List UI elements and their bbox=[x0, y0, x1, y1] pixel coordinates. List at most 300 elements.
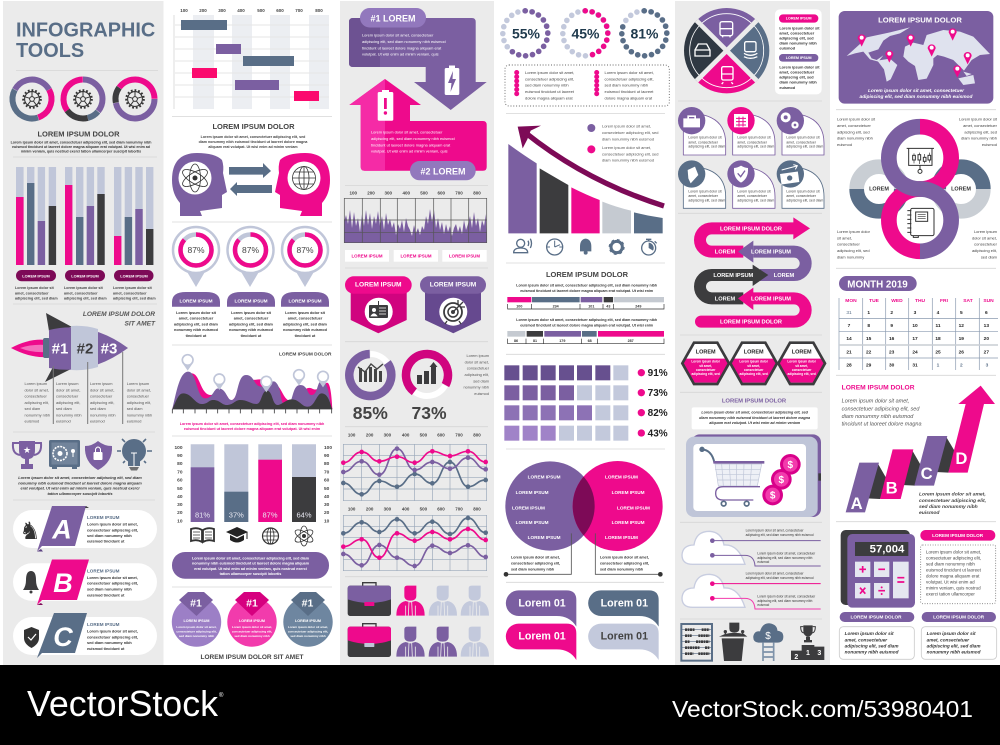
stacked bar 2: 287 bbox=[628, 339, 634, 343]
calendar: 12 bbox=[959, 323, 964, 329]
gantt chart: 300 bbox=[218, 8, 226, 13]
pink arrow panel: adipiscing elit, sed diam nonummy nibh euismod bbox=[371, 136, 455, 141]
white list panel: adipiscing elit, sed bbox=[779, 76, 814, 80]
hexagons: LOREM bbox=[744, 350, 764, 356]
clouds with leader lines: adipiscing elit, sed diam nonummy nibh bbox=[757, 556, 813, 560]
stacked bar heading: euismod tincidunt ut laoreet dolore magna aliquam erat volutpat. Ut wisi enim bbox=[520, 289, 653, 293]
label boxes: LOREM IPSUM bbox=[401, 254, 432, 259]
calendar: 1 bbox=[937, 362, 940, 368]
calendar: 29 bbox=[866, 362, 872, 368]
pin donuts: adipiscing elit, sed diam bbox=[283, 322, 328, 326]
calculator side panels: LOREM IPSUM DOLOR bbox=[933, 615, 985, 620]
percentage column chart: 40 bbox=[177, 494, 183, 500]
white list panel: LOREM IPSUM bbox=[786, 17, 812, 21]
line chart 1: 500 bbox=[420, 432, 428, 437]
icon cards: amet, consectetuer bbox=[688, 140, 719, 144]
figure eight rings: diam nonummy nibh bbox=[837, 136, 873, 141]
icon cards: adipiscing elit, sed diam bbox=[688, 198, 725, 202]
icon row text: tation ullamcorper suscipit lobortis bbox=[47, 491, 113, 496]
calendar: SAT bbox=[963, 298, 973, 304]
line chart 1: 700 bbox=[455, 432, 463, 437]
figure eight rings bbox=[837, 116, 998, 259]
figure eight rings: dolor sit amet, bbox=[972, 235, 997, 240]
rocket text columns: consectetuer bbox=[127, 394, 150, 399]
ABCD ribbon arrow: Lorem ipsum dolor sit amet, bbox=[919, 492, 986, 498]
ABCD ribbon arrow: consectetuer adipiscing elit, sed bbox=[842, 406, 920, 412]
gear donuts bbox=[5, 72, 162, 126]
calculator bbox=[841, 530, 915, 608]
pin donuts: nonummy nibh euismod bbox=[283, 328, 328, 332]
heading with text: diam nonummy nibh euismod tincidunt ut laoreet dolore magna bbox=[199, 140, 308, 144]
rocket: #3 bbox=[101, 340, 117, 358]
three badge circles: Lorem ipsum dolor sit amet, bbox=[176, 625, 217, 629]
venn diagram: LOREM IPSUM bbox=[528, 475, 561, 480]
rocket text columns: adipiscing elit, bbox=[56, 400, 80, 405]
three badge circles: #1 bbox=[246, 598, 258, 610]
snake arrows: LOREM bbox=[715, 296, 735, 302]
shield badges: LOREM IPSUM bbox=[355, 282, 402, 288]
pin donuts: tincidunt ut bbox=[186, 334, 207, 338]
title: TOOLS bbox=[16, 40, 84, 62]
white list panel: Lorem ipsum dolor sit bbox=[779, 65, 820, 69]
heads exchange bbox=[172, 153, 330, 216]
percentage column chart: 50 bbox=[177, 486, 183, 492]
calculator side panels: adipiscing elit, sed diam bbox=[845, 643, 898, 648]
panel: A bbox=[13, 506, 157, 552]
white list panel: adipiscing elit, sed bbox=[779, 37, 814, 41]
snake arrows: LOREM IPSUM bbox=[751, 250, 791, 256]
icon row text: erat volutpat. Ut wisi enim ad minim veniam, quis nostrud exerci bbox=[21, 486, 140, 491]
calculator side panels: consectetuer adipiscing elit, bbox=[926, 555, 981, 560]
hexagons: Lorem ipsum dolor bbox=[691, 360, 721, 364]
white list panel: LOREM IPSUM bbox=[786, 56, 812, 60]
dotted text box: dolore magna aliquam erat bbox=[604, 96, 653, 100]
figure eight rings: adipiscing elit, sed bbox=[837, 129, 870, 134]
calendar: 2 bbox=[890, 310, 893, 316]
line chart 2: 200 bbox=[366, 507, 374, 512]
figure eight rings: amet, consectetuer bbox=[837, 123, 872, 128]
white list panel: Lorem ipsum dolor sit bbox=[779, 26, 820, 30]
rocket heading: SIT AMET bbox=[124, 320, 156, 328]
progress donuts: adipiscing elit, bbox=[465, 372, 489, 377]
line chart 1: 800 bbox=[473, 432, 481, 437]
spiky area chart: 100 bbox=[350, 190, 358, 196]
figure eight rings: adipiscing elit, sed bbox=[837, 248, 870, 253]
speech bubbles: Lorem 01 bbox=[518, 597, 566, 609]
percentage column chart: 70 bbox=[177, 470, 183, 476]
figure eight rings: consectetuer bbox=[837, 242, 860, 247]
percentage column chart: 10 bbox=[177, 518, 183, 524]
dotted text box: Lorem ipsum dolor sit amet, bbox=[604, 70, 654, 75]
snake arrows: LOREM bbox=[774, 273, 794, 279]
figure eight rings: Lorem ipsum dolor sit bbox=[837, 116, 876, 121]
venn diagram: sed diam nonummy nibh bbox=[600, 567, 643, 571]
pin donuts: LOREM IPSUM bbox=[179, 298, 213, 304]
purple arrow panel: adipiscing elit, sed diam nonummy nibh euismod bbox=[362, 39, 446, 44]
hexagons: adipiscing elit, sed bbox=[788, 372, 816, 376]
dotted progress rings: 81% bbox=[630, 26, 659, 42]
mountain caption: euismod tincidunt ut laoreet dolore magna aliquam erat volutpat. Ut wisi enim bbox=[184, 427, 321, 431]
figure eight rings: diam nonummy nibh bbox=[961, 136, 997, 141]
pin donuts: Lorem ipsum dolor sit bbox=[285, 311, 326, 315]
hexagons: LOREM bbox=[792, 350, 812, 356]
rocket text columns: consectetuer bbox=[90, 394, 113, 399]
venn diagram: LOREM IPSUM bbox=[516, 490, 549, 495]
calendar: 18 bbox=[935, 336, 941, 342]
purple caption pill: nonummy nibh euismod tincidunt ut laoreet dolore magna aliquam bbox=[192, 562, 310, 566]
percentage column chart: 20 bbox=[324, 510, 330, 516]
panel: A: euismod tincidunt ut bbox=[87, 540, 125, 544]
bottom icons: abacus, speaker, cloud ladder, podium: 1 bbox=[806, 650, 810, 657]
hexagons: sit amet, bbox=[795, 364, 808, 368]
shield badges bbox=[345, 276, 486, 333]
gantt chart: 100 bbox=[180, 8, 188, 13]
percentage column chart: 100 bbox=[174, 445, 183, 451]
calendar: 26 bbox=[959, 349, 964, 355]
pin donuts bbox=[172, 227, 329, 338]
stacked bar 2: 179 bbox=[559, 339, 565, 343]
panel: C bbox=[13, 613, 157, 658]
panel: B bbox=[13, 560, 157, 605]
panel: B: LOREM IPSUM bbox=[87, 568, 120, 574]
calendar: 8 bbox=[867, 323, 870, 329]
purple caption pill: erat volutpat. Ut wisi enim ad minim veniam, quis nostrud exerci bbox=[194, 567, 307, 571]
hexagons: consectetuer bbox=[792, 368, 812, 372]
bar labels: amet, consectetuer bbox=[113, 291, 147, 295]
calendar: 20 bbox=[984, 336, 989, 342]
progress donuts: 85% bbox=[353, 403, 388, 423]
column backgrounds bbox=[3, 1, 830, 665]
transport pie bbox=[684, 8, 769, 93]
calculator side panels: volutpat. Ut wisi enim ad bbox=[926, 579, 975, 584]
icon row text: Lorem ipsum dolor sit amet, consectetuer adipiscing elit, sed diam bbox=[18, 475, 142, 480]
calendar: MON bbox=[845, 298, 857, 304]
figure eight rings: adipiscing elit, bbox=[972, 248, 997, 253]
title: INFOGRAPHIC bbox=[16, 20, 155, 42]
panel: C: sed diam nonummy nibh bbox=[87, 641, 132, 645]
calendar: 7 bbox=[848, 323, 851, 329]
ABCD ribbon arrow: tincidunt ut laoreet dolore magna bbox=[842, 422, 922, 428]
hexagons: adipiscing elit, sed bbox=[740, 372, 768, 376]
gantt chart: 400 bbox=[237, 8, 245, 13]
three badge circles: LOREM IPSUM bbox=[239, 619, 265, 623]
calculator side panels: LOREM IPSUM DOLOR bbox=[851, 615, 902, 620]
tablet heading and note: diam nonummy nibh euismod tincidunt ut laoreet dolore magna bbox=[699, 416, 810, 420]
heading and intro text bbox=[11, 130, 151, 154]
rocket text columns: sed diam bbox=[127, 406, 142, 411]
bottom icons: abacus, speaker, cloud ladder, podium: 2 bbox=[794, 654, 798, 661]
three badge circles: Lorem ipsum dolor sit amet, bbox=[288, 625, 328, 629]
rocket text columns: sed diam bbox=[24, 406, 40, 411]
declining area chart with arrow: Lorem ipsum dolor sit amet, bbox=[602, 145, 651, 150]
calendar: 10 bbox=[912, 323, 918, 329]
icon row: trophy, safe, shield, bulb bbox=[13, 439, 152, 470]
figure eight rings: sit amet, bbox=[837, 235, 852, 240]
bar labels: adipiscing elit, sed diam bbox=[113, 296, 156, 300]
square waffle chart bbox=[504, 365, 668, 441]
rocket text columns: euismod bbox=[24, 418, 39, 424]
progress donuts: dolor sit amet, bbox=[465, 359, 489, 364]
icon cards: Lorem ipsum dolor sit bbox=[688, 189, 722, 193]
clouds with leader lines: Lorem ipsum dolor sit amet, consectetuer bbox=[746, 528, 804, 532]
percentage column chart: 30 bbox=[324, 502, 330, 508]
line chart 2: 500 bbox=[420, 507, 428, 512]
footer bar bbox=[0, 665, 1000, 745]
rocket text columns: euismod bbox=[56, 418, 71, 424]
ABCD ribbon arrow: B bbox=[886, 478, 898, 497]
percentage column chart: 64% bbox=[296, 511, 312, 520]
world map panel: Lorem ipsum dolor sit amet, consectetuer bbox=[868, 88, 965, 94]
stacked bar 2 bbox=[507, 331, 664, 344]
label boxes bbox=[345, 250, 487, 262]
calendar: 27 bbox=[984, 349, 989, 355]
calculator side panels bbox=[839, 530, 997, 659]
progress donuts: nonummy nibh bbox=[463, 385, 489, 390]
pin donuts: 87% bbox=[187, 245, 205, 255]
line chart 1: 100 bbox=[348, 432, 356, 437]
icon cards: amet, consectetuer bbox=[786, 194, 817, 198]
white list panel bbox=[775, 9, 822, 94]
ABCD ribbon arrow: diam nonummy nibh euismod bbox=[842, 414, 914, 420]
tablet with cart and coins: $ bbox=[779, 475, 785, 486]
calendar: MONTH 2019 bbox=[847, 279, 908, 290]
three badge circles: sed diam nonummy nibh bbox=[234, 634, 270, 638]
venn diagram: LOREM IPSUM bbox=[605, 475, 638, 480]
declining area chart with arrow bbox=[508, 124, 664, 233]
stacked bar 1 bbox=[507, 297, 664, 309]
calendar: 3 bbox=[986, 362, 989, 368]
declining area chart with arrow: Lorem ipsum dolor sit amet, bbox=[602, 124, 651, 129]
panel: A: consectetuer adipiscing elit, bbox=[87, 528, 138, 532]
declining area chart with arrow: diam nonummy nibh euismod bbox=[602, 136, 654, 141]
three badge circles: sed diam nonummy nibh bbox=[290, 634, 326, 638]
icons: book, cap, globe, atom bbox=[191, 526, 315, 546]
stacked bar text: Lorem ipsum dolor sit amet, consectetuer adipiscing elit, sed diam nonummy nibh bbox=[516, 318, 657, 322]
speech bubbles: Lorem 01 bbox=[601, 597, 648, 609]
calendar bbox=[839, 276, 998, 370]
pink arrow panel: #2 LOREM bbox=[420, 166, 466, 176]
pin donuts: adipiscing elit, sed diam bbox=[174, 322, 219, 326]
three badge circles: sed diam nonummy nibh bbox=[179, 634, 214, 638]
hexagons: consectetuer bbox=[696, 368, 716, 372]
ABCD ribbon arrow: D bbox=[955, 449, 967, 468]
line chart 2: 800 bbox=[473, 507, 481, 512]
pin donuts: Lorem ipsum dolor sit bbox=[231, 311, 272, 315]
line chart 2 bbox=[341, 507, 488, 571]
calendar: 2 bbox=[960, 362, 963, 368]
speech bubbles bbox=[506, 590, 659, 660]
rocket bbox=[11, 313, 128, 424]
panel: C: euismod tincidunt ut bbox=[87, 647, 125, 651]
panel: B: sed diam nonummy nibh bbox=[87, 588, 132, 592]
icon cards: amet, consectetuer bbox=[737, 194, 768, 198]
rocket text columns: adipiscing elit, bbox=[24, 400, 49, 405]
pin donuts: LOREM IPSUM bbox=[234, 298, 268, 304]
percentage column chart: 90 bbox=[177, 453, 183, 459]
venn diagram: LOREM IPSUM bbox=[516, 520, 549, 525]
slate icon row bbox=[514, 239, 657, 255]
rocket text columns: consectetuer bbox=[24, 394, 47, 399]
rocket: #1 bbox=[52, 340, 68, 358]
rocket text columns: dolor sit amet, bbox=[127, 387, 151, 392]
bottom icons: abacus, speaker, cloud ladder, podium: 3 bbox=[817, 650, 821, 657]
clouds with leader lines: adipiscing elit, sed diam nonummy nibh bbox=[757, 599, 813, 603]
rocket text columns: dolor sit amet, bbox=[90, 387, 114, 392]
speech bubbles: Lorem 01 bbox=[601, 631, 648, 643]
tablet with cart and coins: $ bbox=[770, 491, 776, 502]
rocket heading: LOREM IPSUM DOLOR bbox=[83, 311, 155, 318]
panel: C: consectetuer adipiscing elit, bbox=[87, 635, 138, 639]
hexagons: sit amet, bbox=[699, 364, 712, 368]
figure eight rings: sed diam bbox=[981, 254, 998, 259]
venn diagram bbox=[504, 461, 663, 577]
gantt chart: 800 bbox=[315, 8, 323, 13]
calendar: 19 bbox=[959, 336, 964, 342]
line chart 2: 400 bbox=[402, 507, 410, 512]
clouds with leader lines: Lorem ipsum dolor sit amet, consectetuer bbox=[757, 595, 815, 599]
pin donuts: amet, consectetuer bbox=[234, 317, 269, 321]
heading with text: aliquam erat volutpat. Ut wisi enim ad minim veniam bbox=[208, 145, 298, 149]
pin donuts: nonummy nibh euismod bbox=[229, 328, 274, 332]
bar labels bbox=[15, 270, 156, 300]
declining area chart with arrow: consectetuer adipiscing elit, sed bbox=[602, 151, 658, 156]
three badge circles: LOREM IPSUM bbox=[183, 619, 210, 623]
panel: A: ♞ bbox=[19, 517, 41, 545]
panel: A: A bbox=[51, 514, 72, 544]
calendar: 3 bbox=[914, 310, 917, 316]
icon cards: Lorem ipsum dolor sit bbox=[786, 136, 820, 140]
calculator side panels: nonummy nibh euismod bbox=[845, 649, 899, 654]
declining area chart with arrow: diam nonummy nibh euismod bbox=[602, 158, 654, 163]
line chart 1: 600 bbox=[437, 432, 445, 437]
dotted progress rings bbox=[503, 11, 667, 56]
progress donuts: Lorem ipsum bbox=[466, 353, 489, 358]
pin donuts: adipiscing elit, sed diam bbox=[229, 322, 274, 326]
panel: C: Lorem ipsum dolor sit amet, bbox=[87, 630, 138, 634]
rocket text columns: nonummy nibh bbox=[90, 412, 116, 417]
calendar: 28 bbox=[846, 362, 852, 368]
white list panel: diam nonummy nibh bbox=[779, 42, 817, 46]
snake arrows: LOREM IPSUM bbox=[751, 296, 791, 302]
snake arrows: LOREM bbox=[715, 250, 735, 256]
clouds with leader lines: euismod bbox=[757, 603, 770, 607]
calendar: 23 bbox=[889, 349, 895, 355]
pin donuts: LOREM IPSUM bbox=[288, 298, 322, 304]
purple arrow panel bbox=[349, 8, 487, 110]
pin donuts: amet, consectetuer bbox=[288, 317, 323, 321]
square waffle chart: 73% bbox=[648, 388, 668, 399]
spiky area chart: 700 bbox=[455, 190, 463, 196]
figure eight rings: Lorem ipsum dolor bbox=[837, 229, 871, 234]
bar labels: adipiscing elit, sed diam bbox=[64, 296, 107, 300]
line chart 2: 600 bbox=[437, 507, 445, 512]
rocket: #2 bbox=[77, 340, 93, 358]
stacked bar 2: 86 bbox=[514, 339, 518, 343]
clouds with leader lines bbox=[682, 528, 821, 609]
icon cards: Lorem ipsum dolor sit bbox=[737, 189, 771, 193]
dotted text box: euismod tincidunt ut laoreet bbox=[525, 89, 575, 94]
bottom icons: abacus, speaker, cloud ladder, podium bbox=[681, 623, 824, 661]
venn diagram: LOREM IPSUM bbox=[612, 490, 645, 495]
square waffle chart: 43% bbox=[648, 428, 668, 439]
spiky area chart: 400 bbox=[403, 190, 411, 196]
rocket text columns: nonummy nibh bbox=[127, 412, 152, 417]
dotted text box: euismod tincidunt ut laoreet bbox=[604, 89, 654, 94]
figure eight rings: LOREM bbox=[951, 187, 971, 193]
rocket text columns: Lorem ipsum bbox=[90, 381, 112, 386]
purple arrow panel: volutpat. Ut wisi enim ad minim veniam, quis bbox=[362, 52, 439, 56]
pin donuts: 87% bbox=[296, 245, 314, 255]
line chart 1: 300 bbox=[384, 432, 392, 437]
rocket text columns: Lorem ipsum bbox=[127, 381, 149, 386]
rocket text columns: dolor sit amet, bbox=[24, 387, 49, 392]
pin donuts: amet, consectetuer bbox=[179, 317, 214, 321]
calendar: FRI bbox=[940, 298, 949, 304]
calendar: THU bbox=[915, 298, 925, 304]
line chart 1 bbox=[341, 432, 488, 501]
percentage column chart: 20 bbox=[177, 510, 183, 516]
percentage column chart: 30 bbox=[177, 502, 183, 508]
purple caption pill bbox=[172, 552, 329, 579]
footer bar: ® bbox=[219, 692, 224, 699]
pin donuts: Lorem ipsum dolor sit bbox=[176, 311, 217, 315]
panel: A: Lorem ipsum dolor sit amet, bbox=[87, 522, 138, 526]
icon cards: Lorem ipsum dolor sit bbox=[737, 136, 771, 140]
calendar: 14 bbox=[846, 336, 852, 342]
dotted text box: consectetuer adipiscing elit, bbox=[604, 76, 654, 82]
snake arrows: LOREM IPSUM DOLOR bbox=[720, 320, 782, 326]
ABCD ribbon arrow: euismod bbox=[919, 510, 940, 516]
pin donuts: 87% bbox=[242, 245, 259, 255]
heading and intro text: LOREM IPSUM DOLOR bbox=[37, 130, 120, 138]
figure eight rings: amet, consectetuer bbox=[963, 123, 998, 128]
bar labels: amet, consectetuer bbox=[64, 291, 98, 295]
pink arrow panel: volutpat. Ut wisi enim ad minim veniam, quis bbox=[371, 148, 448, 154]
panel: A: sed diam nonummy nibh bbox=[87, 534, 132, 538]
dotted text box: sed diam nonummy nibh bbox=[525, 83, 569, 88]
percentage column chart: 90 bbox=[324, 453, 330, 459]
percentage column chart: 87% bbox=[262, 511, 278, 520]
shield badges: LOREM IPSUM bbox=[430, 282, 477, 288]
calendar: SUN bbox=[983, 298, 994, 304]
tablet heading and note: Lorem ipsum dolor sit amet, consectetuer adipiscing elit, sed bbox=[701, 411, 809, 415]
grouped bar chart bbox=[16, 167, 153, 265]
bar labels: LOREM IPSUM bbox=[22, 273, 50, 278]
purple caption pill: tation ullamcorper suscipit lobortis bbox=[220, 572, 281, 576]
calculator side panels: LOREM IPSUM DOLOR bbox=[932, 533, 984, 538]
clouds with leader lines: adipiscing elit, sed diam nonummy nibh euismod bbox=[746, 576, 814, 580]
calendar: 9 bbox=[890, 323, 893, 329]
purple arrow panel: tincidunt ut laoreet dolore magna aliquam erat bbox=[362, 45, 442, 50]
calculator side panels: minim veniam, quis nostrud bbox=[926, 585, 981, 590]
calculator side panels: exerci tation ullamcorper bbox=[926, 592, 975, 597]
icon row: trophy, safe, shield, bulb: ★ bbox=[23, 446, 31, 456]
bar labels: amet, consectetuer bbox=[15, 291, 49, 295]
icon row text: nonummy nibh euismod tincidunt ut laoreet dolore magna aliquam bbox=[18, 480, 142, 486]
column 2 footer heading: LOREM IPSUM DOLOR SIT AMET bbox=[200, 654, 304, 661]
dotted progress rings: 55% bbox=[512, 26, 541, 42]
heading and intro text: euismod tincidunt ut laoreet dolore magna aliquam erat volutpat. Ut wisi enim ad bbox=[12, 145, 150, 149]
pin donuts: nonummy nibh euismod bbox=[174, 328, 219, 332]
line chart 2: 700 bbox=[455, 507, 463, 512]
line chart 2: 300 bbox=[384, 507, 392, 512]
calendar: 31 bbox=[846, 310, 852, 316]
bar labels: Lorem ipsum dolor sit bbox=[64, 286, 103, 290]
pink arrow panel bbox=[349, 79, 487, 180]
mountain caption: Lorem ipsum dolor sit amet, consectetuer adipiscing elit, sed diam nonummy nibh bbox=[180, 422, 325, 426]
percentage column chart: 50 bbox=[324, 486, 330, 492]
clouds with leader lines: Lorem ipsum dolor sit amet, consectetuer bbox=[746, 571, 804, 575]
